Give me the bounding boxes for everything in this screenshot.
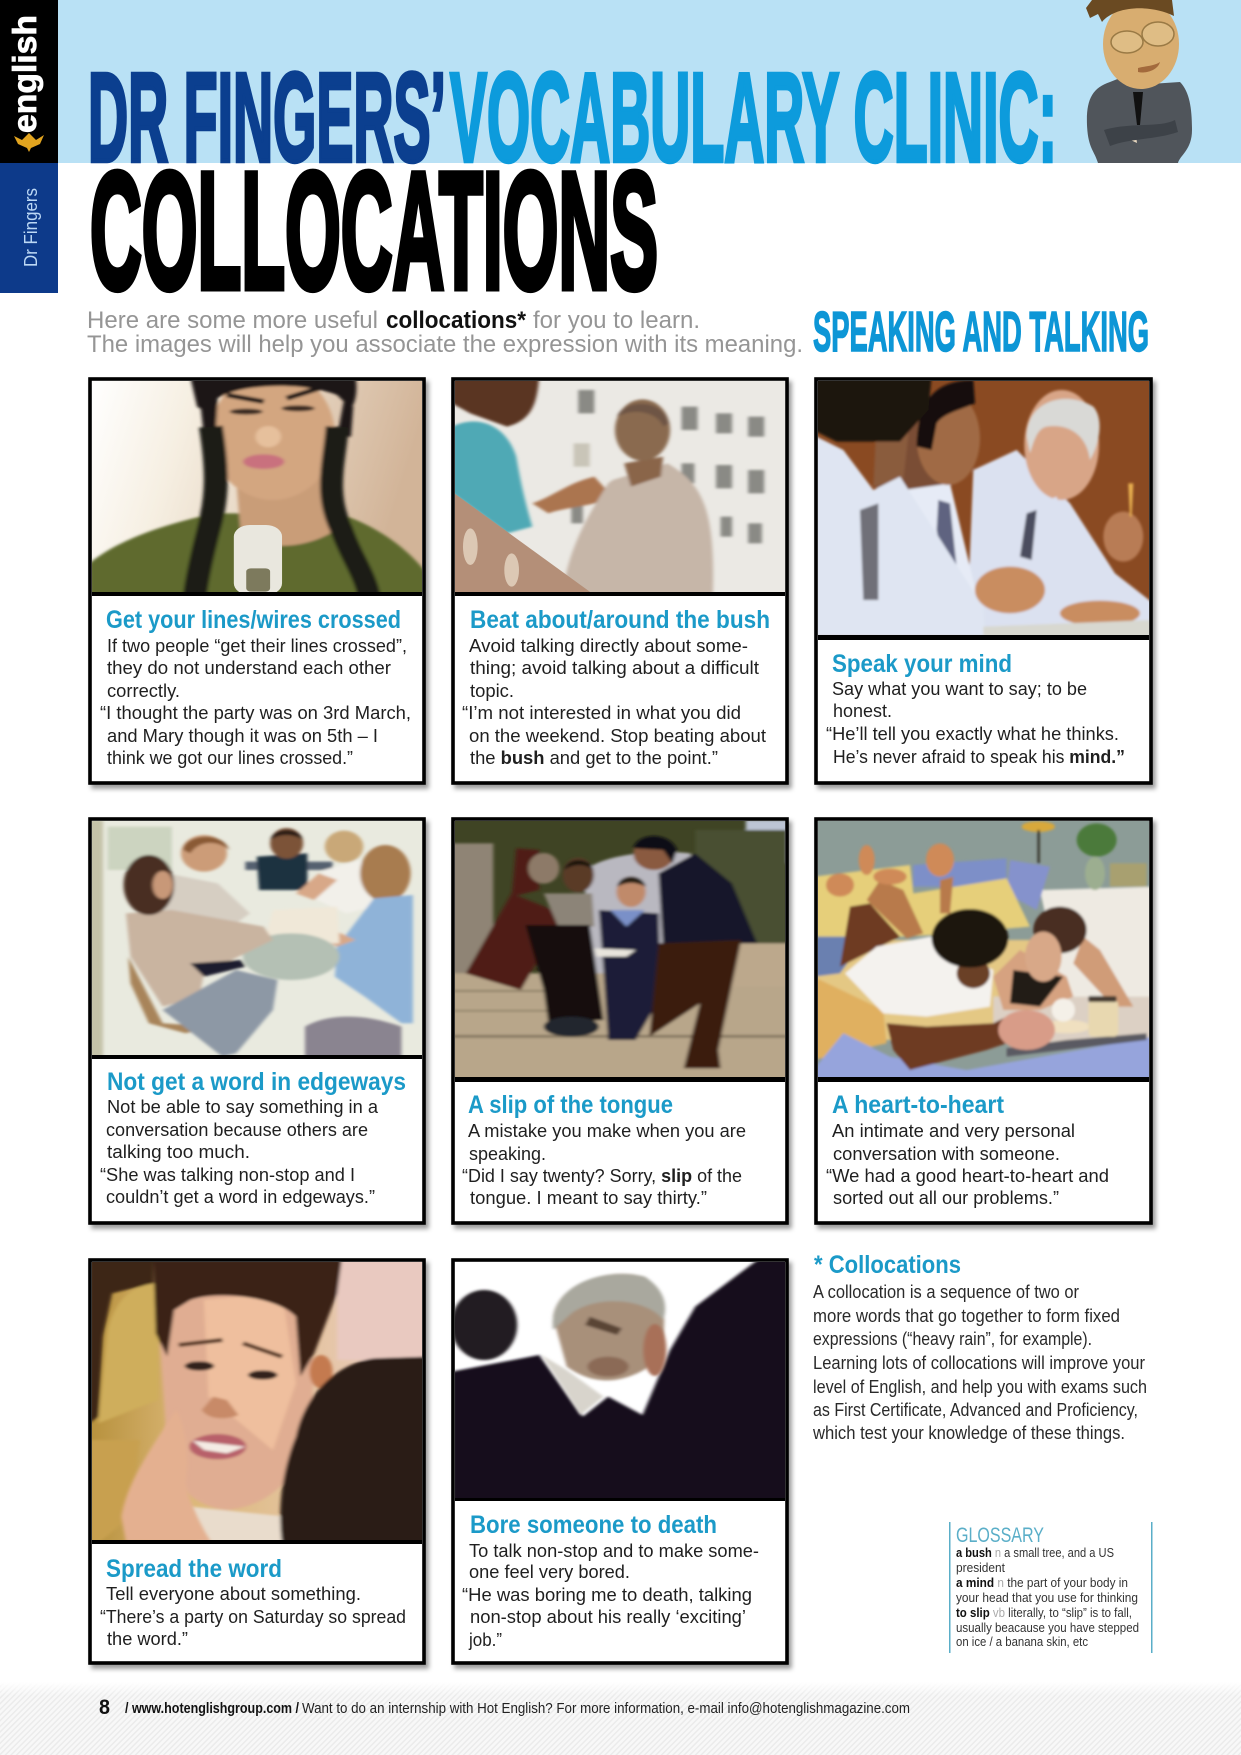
photo: man falling asleep: [451, 1258, 792, 1503]
glossary entries: usually beacause you have stepped: [956, 1621, 1139, 1635]
photo: couple on a bed: [813, 821, 1153, 1080]
panel: get your lines crossed: [89, 370, 429, 783]
definition: An intimate and very personal: [832, 1120, 1075, 1141]
definition: talking too much.: [107, 1141, 250, 1162]
note text: as First Certificate, Advanced and Proficiency,: [813, 1400, 1138, 1420]
definition: tongue. I meant to say thirty.”: [470, 1187, 707, 1208]
definition: the word.”: [107, 1628, 188, 1649]
definition: [462, 1540, 759, 1650]
definition: “He’ll tell you exactly what he thinks.: [826, 723, 1119, 744]
photo: three businessmen: [813, 377, 1153, 640]
intro text: [87, 307, 803, 358]
panel: bore someone to death: [451, 1258, 792, 1663]
note text: level of English, and help you with exams such: [813, 1377, 1147, 1397]
illustration: Dr Fingers caricature: [1086, 0, 1192, 163]
definition: speaking.: [469, 1143, 546, 1164]
definition: [100, 1096, 379, 1207]
definition: they do not understand each other: [107, 657, 391, 678]
definition: [100, 635, 411, 768]
note text: Learning lots of collocations will improve your: [813, 1353, 1145, 1373]
footer band: [0, 1682, 1241, 1755]
note text: more words that go together to form fixed: [813, 1306, 1120, 1326]
panel: a heart-to-heart: [813, 819, 1153, 1223]
sidebar section tab: [0, 163, 58, 293]
header band: [58, 0, 1241, 163]
definition: job.”: [468, 1629, 502, 1650]
note text: expressions (“heavy rain”, for example).: [813, 1329, 1092, 1349]
glossary entries: [956, 1546, 1139, 1649]
definition: [100, 1583, 406, 1649]
definition: [826, 1120, 1109, 1208]
glossary entries: a bush n a small tree, and a US: [956, 1546, 1114, 1560]
heading: Speak your mind: [832, 650, 1012, 678]
icon: orange star: [14, 133, 44, 152]
panel: a slip of the tongue: [452, 819, 792, 1223]
definition: “Did I say twenty? Sorry, slip of the: [462, 1165, 742, 1186]
definition: Avoid talking directly about some-: [469, 635, 748, 656]
intro text: Here are some more useful: [87, 307, 378, 334]
definition: on the weekend. Stop beating about: [469, 725, 766, 746]
sidebar section tab: Dr Fingers: [21, 188, 41, 267]
intro text: collocations*: [386, 307, 527, 334]
intro text: for you to learn.: [533, 307, 700, 334]
panel: glossary: [949, 1522, 1152, 1653]
footer message: Want to do an internship with Hot English? For more information, e-mail info@hotenglishmagazine.com: [302, 1700, 910, 1717]
panel: collocations note: [812, 1251, 1147, 1443]
photo: group on steps: [452, 820, 792, 1080]
intro text: The images will help you associate the expression with its meaning.: [87, 331, 803, 358]
definition: non-stop about his really ‘exciting’: [470, 1606, 746, 1627]
definition: correctly.: [107, 680, 180, 701]
definition: A mistake you make when you are: [468, 1120, 746, 1141]
title line one: DR FINGERS’: [88, 47, 446, 188]
definition: think we got our lines crossed.”: [107, 747, 353, 768]
glossary entries: president: [956, 1561, 1005, 1575]
definition: Say what you want to say; to be: [832, 678, 1087, 699]
photo: two people talking: [452, 377, 785, 597]
definition: honest.: [833, 700, 892, 721]
definition: To talk non-stop and to make some-: [469, 1540, 759, 1561]
page number: 8: [99, 1696, 110, 1719]
note text: [812, 1282, 1147, 1443]
definition: He’s never afraid to speak his mind.”: [833, 746, 1125, 767]
panel: beat about the bush: [452, 377, 787, 783]
definition: If two people “get their lines crossed”,: [107, 635, 407, 656]
photo: group at a table: [89, 820, 422, 1060]
panel: not get a word in edgeways: [89, 819, 424, 1223]
panel: speak your mind: [813, 377, 1153, 783]
definition: [462, 1120, 746, 1208]
glossary heading: GLOSSARY: [956, 1524, 1044, 1547]
definition: thing; avoid talking about a difficult: [470, 657, 759, 678]
definition: topic.: [470, 680, 514, 701]
heading: A heart-to-heart: [832, 1091, 1005, 1119]
definition: “I’m not interested in what you did: [462, 702, 741, 723]
definition: sorted out all our problems.”: [833, 1187, 1059, 1208]
definition: [826, 678, 1125, 767]
definition: [462, 635, 766, 768]
heading: Spread the word: [106, 1555, 282, 1583]
definition: conversation with someone.: [833, 1143, 1060, 1164]
logo: english: english: [6, 15, 43, 133]
heading: Not get a word in edgeways: [107, 1068, 406, 1096]
definition: “We had a good heart-to-heart and: [826, 1165, 1109, 1186]
panel: spread the word: [89, 1257, 429, 1663]
definition: Tell everyone about something.: [106, 1583, 361, 1604]
heading: Beat about/around the bush: [470, 606, 770, 634]
photo: man whispering: [89, 1257, 429, 1543]
note text: A collocation is a sequence of two or: [813, 1282, 1079, 1302]
definition: “There’s a party on Saturday so spread: [100, 1606, 406, 1627]
definition: Not be able to say something in a: [107, 1096, 379, 1117]
definition: and Mary though it was on 5th – I: [107, 725, 378, 746]
definition: couldn’t get a word in edgeways.”: [106, 1186, 375, 1207]
definition: “He was boring me to death, talking: [462, 1584, 752, 1605]
definition: one feel very bored.: [469, 1561, 630, 1582]
definition: conversation because others are: [106, 1119, 368, 1140]
glossary entries: on ice / a banana skin, etc: [956, 1635, 1088, 1649]
glossary entries: your head that you use for thinking: [956, 1591, 1138, 1605]
heading: * Collocations: [814, 1251, 961, 1279]
footer website: / www.hotenglishgroup.com /: [125, 1700, 300, 1717]
definition: the bush and get to the point.”: [470, 747, 718, 768]
heading: Bore someone to death: [470, 1511, 717, 1539]
photo: woman with phone: [89, 370, 429, 597]
heading: A slip of the tongue: [468, 1091, 673, 1119]
heading: Get your lines/wires crossed: [106, 606, 401, 634]
sidebar logo block: [0, 0, 58, 163]
glossary entries: to slip vb literally, to “slip” is to fall,: [956, 1606, 1132, 1620]
definition: “I thought the party was on 3rd March,: [100, 702, 411, 723]
note text: which test your knowledge of these things.: [812, 1423, 1125, 1443]
glossary entries: a mind n the part of your body in: [956, 1576, 1128, 1590]
definition: “She was talking non-stop and I: [100, 1164, 355, 1185]
